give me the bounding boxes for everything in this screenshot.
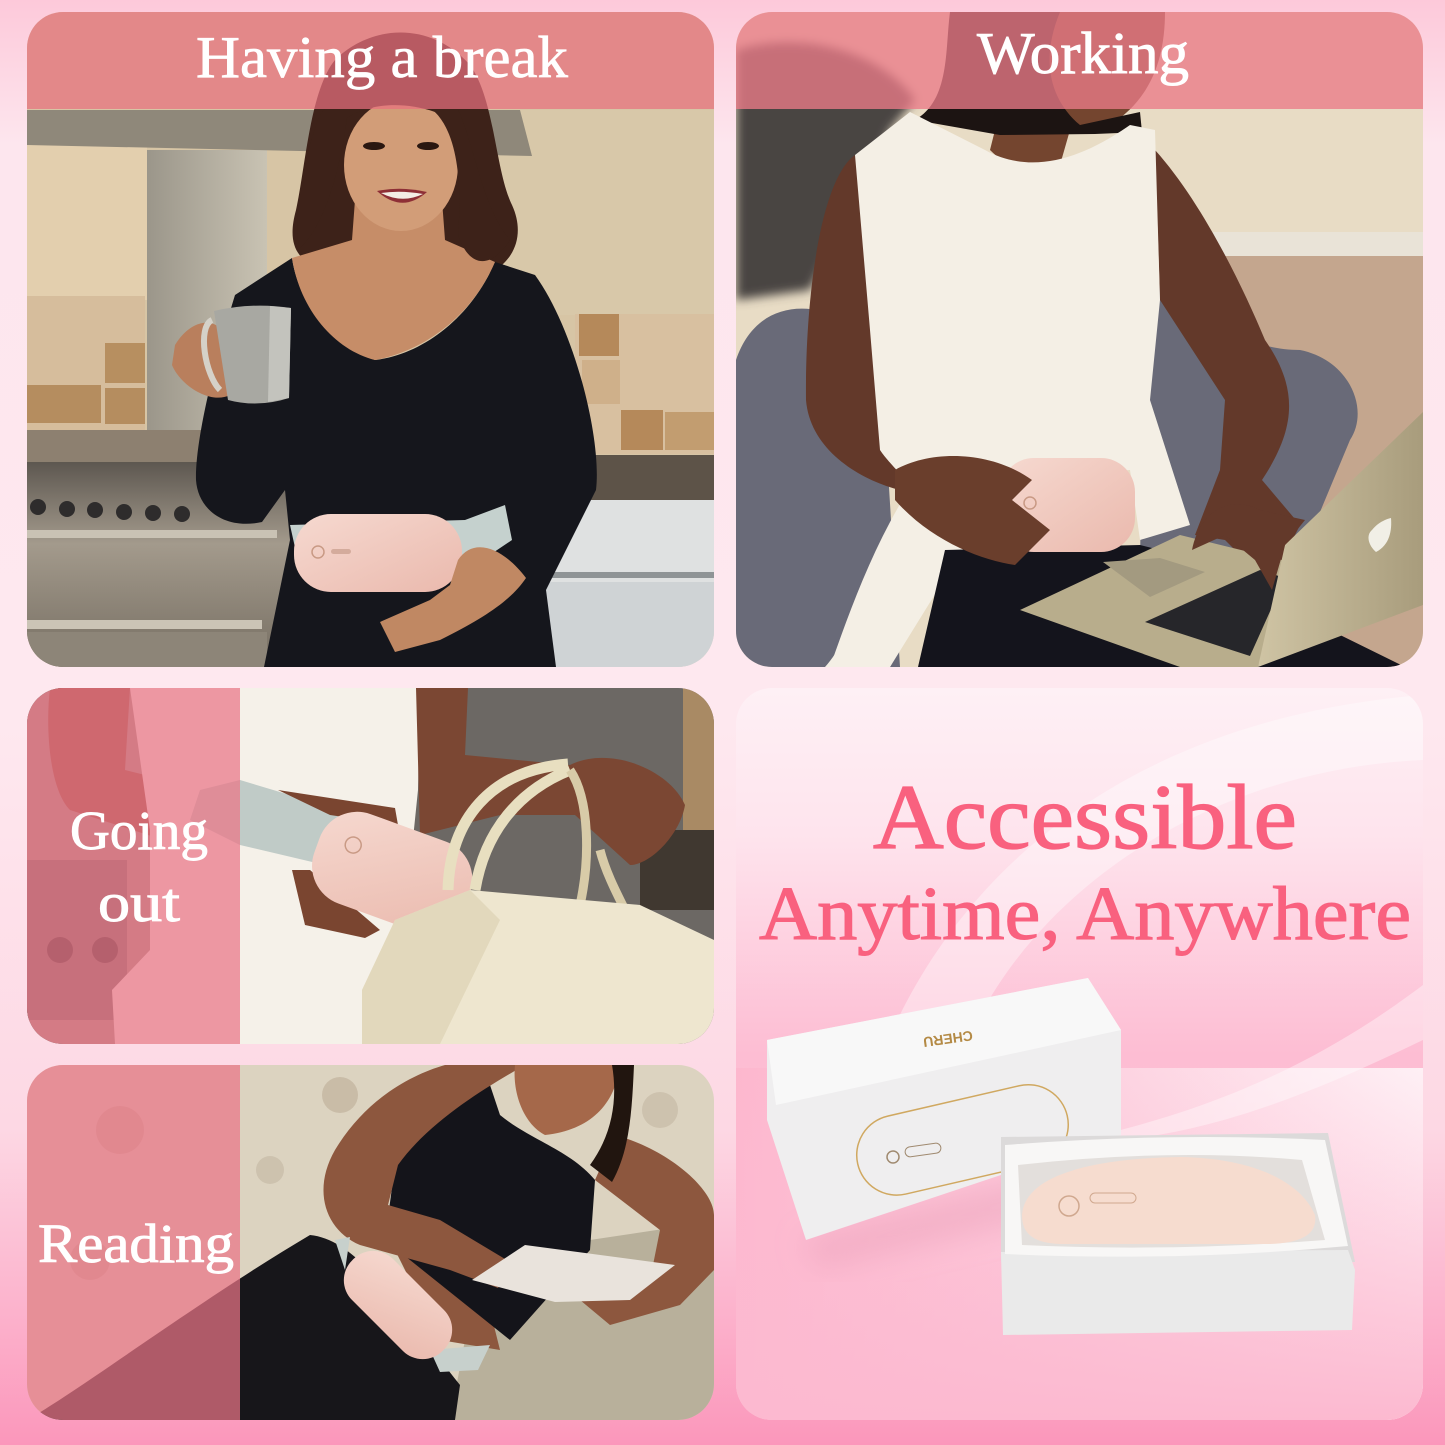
hand on laptop <box>1192 518 1305 590</box>
label: reading: Reading <box>38 1213 234 1274</box>
heading: working: Working <box>977 20 1189 86</box>
person: arm right <box>416 688 685 865</box>
panel: working <box>736 12 1423 667</box>
hand holding device <box>278 790 398 938</box>
person: black top <box>385 1070 595 1340</box>
icon: laptop <box>1020 412 1423 667</box>
label: going out: out <box>98 872 180 933</box>
floor <box>736 1068 1423 1420</box>
panel: accessible anytime anywhere <box>736 688 1423 1420</box>
panel: having a break <box>27 12 714 667</box>
device: heating pad in box <box>1022 1157 1315 1244</box>
panel: going out <box>27 688 714 1044</box>
woman: dark hair <box>915 12 1142 135</box>
ribbon swooshes <box>880 695 1423 1140</box>
label: going out <box>70 800 208 933</box>
woman: black trousers <box>918 545 1405 667</box>
fur decoration <box>736 42 915 300</box>
woman: neck and chest <box>292 200 495 360</box>
heading: anytime anywhere: Anytime, Anywhere <box>759 872 1411 956</box>
panel: reading <box>27 1065 714 1420</box>
device: heating pad <box>332 1239 464 1371</box>
woman: eyes and smile <box>363 142 439 203</box>
label overlay <box>27 1065 240 1420</box>
waist strap <box>190 780 340 865</box>
woman: top and skirt <box>196 258 597 667</box>
tote bag <box>362 764 714 1044</box>
label: going out: Going <box>70 800 208 861</box>
panel background <box>736 688 1423 1420</box>
person: legs <box>27 1235 460 1420</box>
device: heating pad <box>1000 458 1135 552</box>
woman: arms <box>806 150 1300 585</box>
sofa <box>450 1225 714 1420</box>
person: white top <box>112 688 420 1044</box>
magazine <box>472 1245 675 1302</box>
woman: hair front <box>373 99 490 262</box>
header band <box>736 12 1423 109</box>
person: arms <box>323 1065 714 1325</box>
waist strap <box>290 505 512 555</box>
woman: face <box>344 99 458 231</box>
heading: accessible: Accessible <box>873 766 1297 868</box>
icon: mug <box>204 306 291 404</box>
label overlay <box>27 688 240 1044</box>
header band <box>27 12 714 109</box>
device: heating pad <box>312 812 472 924</box>
hand holding mug <box>172 323 230 398</box>
waist strap <box>335 1237 490 1372</box>
woman: face and neck <box>990 12 1165 170</box>
box lid shadow <box>800 1150 1120 1270</box>
hand on device <box>895 456 1050 565</box>
box lid <box>767 978 1121 1240</box>
person: face and hair <box>515 1065 620 1135</box>
kitchen background <box>27 688 714 1044</box>
lid gold pill outline <box>849 1077 1076 1203</box>
floral wall <box>27 1065 714 1420</box>
device: heating pad <box>294 514 462 592</box>
person: belly <box>395 1250 500 1350</box>
room background <box>736 12 1423 667</box>
armchair <box>736 280 1358 667</box>
hand on device <box>380 547 526 652</box>
kitchen background <box>27 12 714 667</box>
lid brand: CHERU <box>922 1028 974 1050</box>
woman: white top <box>825 112 1190 667</box>
woman: hair <box>293 32 518 280</box>
heading: having a break: Having a break <box>196 24 569 90</box>
person: arm left <box>48 688 150 836</box>
open box base <box>1001 1133 1355 1335</box>
